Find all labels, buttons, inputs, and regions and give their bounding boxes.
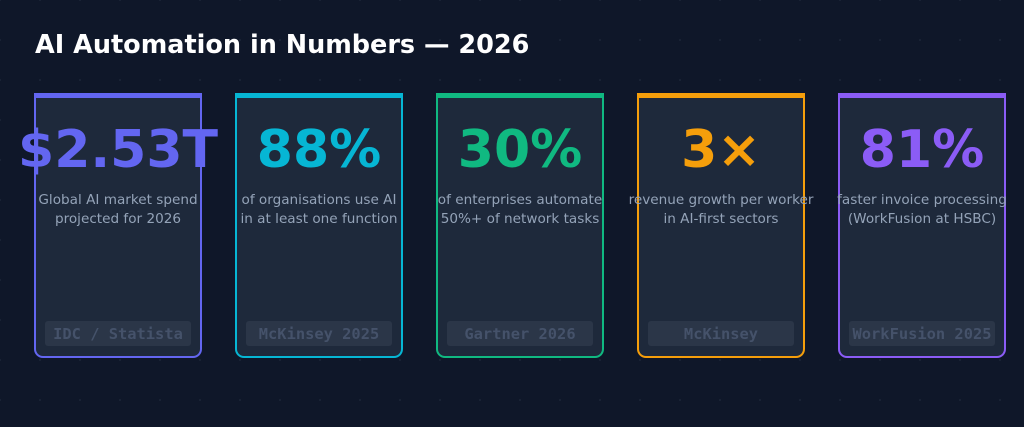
source badge: Gartner 2026 — [464, 325, 576, 343]
description: 50%+ of network tasks — [441, 211, 599, 227]
source badge: McKinsey — [684, 325, 758, 343]
source badge: IDC / Statista — [53, 325, 183, 343]
source badge — [45, 321, 191, 346]
description: projected for 2026 — [55, 211, 181, 227]
description — [837, 192, 1007, 227]
description: of enterprises automate — [438, 192, 602, 208]
source badge: WorkFusion 2025 — [852, 325, 992, 343]
description: of organisations use AI — [242, 192, 396, 208]
stat number: 88% — [257, 120, 381, 180]
description: Global AI market spend — [38, 192, 198, 208]
description: faster invoice processing — [837, 192, 1007, 208]
stat number: 30% — [458, 120, 582, 180]
description — [438, 192, 602, 227]
card: organisations — [235, 93, 403, 358]
source badge: McKinsey 2025 — [259, 325, 379, 343]
description — [38, 192, 198, 227]
stat number: 81% — [860, 120, 984, 180]
title: AI Automation in Numbers — 2026 — [35, 30, 529, 60]
source badge — [648, 321, 794, 346]
description — [240, 192, 398, 227]
description: revenue growth per worker — [629, 192, 813, 208]
source badge — [849, 321, 995, 346]
stat number: $2.53T — [18, 120, 218, 180]
card: invoice processing — [838, 93, 1006, 358]
description: in at least one function — [240, 211, 398, 227]
source badge — [246, 321, 392, 346]
card: revenue growth — [637, 93, 805, 358]
description: (WorkFusion at HSBC) — [848, 211, 996, 227]
description: in AI-first sectors — [663, 211, 779, 227]
source badge — [447, 321, 593, 346]
card: market spend — [34, 93, 202, 358]
card: enterprises — [436, 93, 604, 358]
description — [629, 192, 814, 227]
stat number: 3× — [681, 120, 761, 180]
